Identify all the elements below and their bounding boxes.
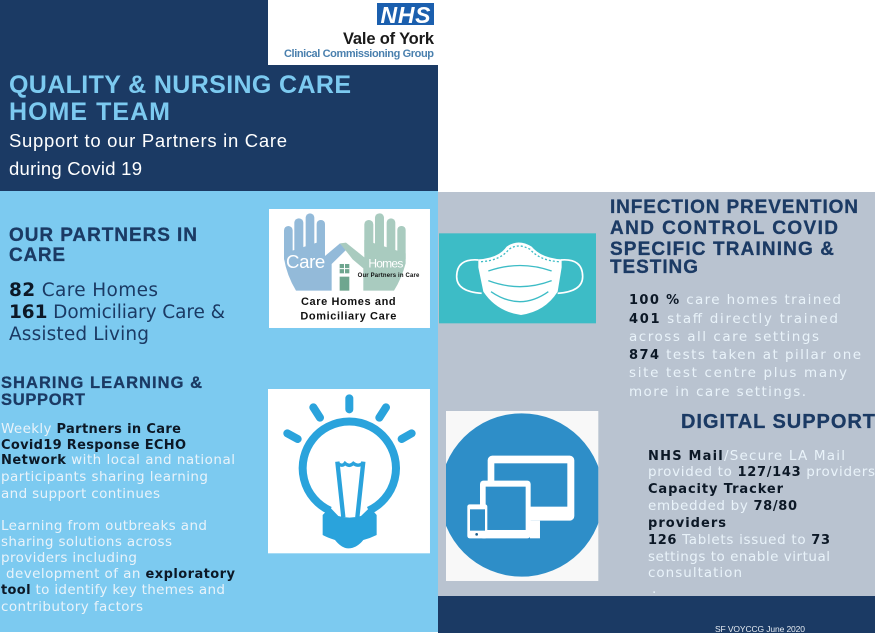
heading: infection prevention and control: AND CONTROL COVID <box>610 218 838 239</box>
text: partner counts: 82 Care Homes <box>9 280 158 301</box>
panel: title banner <box>0 0 438 191</box>
text: digital support figures: settings to enable virtual <box>648 549 830 565</box>
text: training and testing figures: across all care settings <box>629 329 819 345</box>
panel: infection prevention grey background <box>438 192 875 596</box>
panel: digital support <box>440 411 875 597</box>
panel: sharing learning and support <box>1 374 430 615</box>
text: digital support figures: Capacity Tracker <box>648 482 784 497</box>
text: learning from outbreaks: tool to identify key themes and <box>1 582 225 598</box>
logo: NHS Vale of York CCG <box>268 0 438 65</box>
panel: infection prevention <box>439 197 861 400</box>
footer band <box>438 596 875 633</box>
text: weekly ECHO network: and support continues <box>1 486 160 502</box>
heading: infection prevention and control <box>610 197 858 278</box>
heading: infection prevention and control: SPECIFIC TRAINING & <box>610 239 834 260</box>
text: digital support figures: providers <box>648 516 726 531</box>
logo: NHS Vale of York CCG: NHS <box>380 2 431 28</box>
text: learning from outbreaks: development of an exploratory <box>6 566 236 582</box>
text: learning from outbreaks <box>1 518 236 615</box>
text: partner counts: 161 Domiciliary Care & <box>9 302 225 323</box>
text: weekly ECHO network: Weekly Partners in Care <box>1 421 181 437</box>
heading: sharing learning and support: SUPPORT <box>1 391 85 409</box>
icon: face mask <box>439 233 596 323</box>
title: QUALITY & NURSING CARE <box>9 71 351 99</box>
title: HOME TEAM <box>9 98 170 126</box>
text: digital support figures: . <box>652 581 656 597</box>
icon: light bulb <box>268 389 430 553</box>
text: weekly ECHO network: Network with local and national <box>1 452 235 468</box>
heading: sharing learning and support: SHARING LEARNING & <box>1 374 202 392</box>
text: training and testing figures: site test centre plus many <box>629 365 847 381</box>
text: learning from outbreaks: providers including <box>1 550 137 566</box>
heading: digital support: DIGITAL SUPPORT <box>681 411 875 433</box>
text: weekly ECHO network: Covid19 Response ECHO <box>1 438 186 453</box>
logo: NHS Vale of York CCG: Clinical Commissioning Group <box>284 48 434 60</box>
subtitle: during Covid 19 <box>9 158 142 179</box>
text: digital support figures <box>648 448 875 597</box>
text: learning from outbreaks: contributory factors <box>1 599 143 615</box>
title <box>9 71 351 126</box>
heading: infection prevention and control: INFECTION PREVENTION <box>610 197 858 218</box>
text: weekly ECHO network <box>1 421 235 502</box>
icon: digital devices <box>440 411 603 581</box>
text: digital support figures: embedded by 78/80 <box>648 498 797 514</box>
text: learning from outbreaks: sharing solutions across <box>1 534 172 550</box>
subtitle <box>9 130 287 179</box>
icon: care homes hands and house: Domiciliary Care <box>300 310 396 322</box>
text: digital support figures: 126 Tablets issued to 73 <box>648 532 830 548</box>
text: training and testing figures <box>629 292 861 400</box>
icon: care homes hands and house: Homes <box>368 257 403 271</box>
text: weekly ECHO network: participants sharing learning <box>1 469 208 485</box>
text: training and testing figures: 401 staff directly trained <box>629 311 838 327</box>
subtitle: Support to our Partners in Care <box>9 130 287 151</box>
icon: care homes hands and house: Care Homes and <box>301 296 396 308</box>
text: partner counts: Assisted Living <box>9 324 149 345</box>
icon: care homes hands and house <box>269 209 430 328</box>
icon: care homes hands and house: Care <box>286 251 325 272</box>
text: partner counts <box>9 280 225 345</box>
text: digital support figures: NHS Mail/Secure LA Mail <box>648 448 845 464</box>
heading: sharing learning and support <box>1 374 202 409</box>
heading: our partners in care: CARE <box>9 245 65 266</box>
heading: infection prevention and control: TESTING <box>610 257 698 278</box>
text: digital support figures: provided to 127/143 providers <box>648 464 875 480</box>
text: training and testing figures: 100 % care homes trained <box>629 292 841 308</box>
panel: our partners in care <box>9 209 430 345</box>
panel: light blue left column <box>0 191 438 632</box>
text: training and testing figures: 874 tests taken at pillar one <box>629 347 861 363</box>
text: digital support figures: consultation <box>648 565 742 581</box>
heading: our partners in care: OUR PARTNERS IN <box>9 225 197 246</box>
logo: NHS Vale of York CCG: Vale of York <box>343 30 435 48</box>
heading: our partners in care <box>9 225 197 266</box>
icon: care homes hands and house: Our Partners in Care <box>358 273 420 279</box>
text: training and testing figures: more in care settings. <box>629 384 806 400</box>
text: learning from outbreaks: Learning from outbreaks and <box>1 518 207 534</box>
